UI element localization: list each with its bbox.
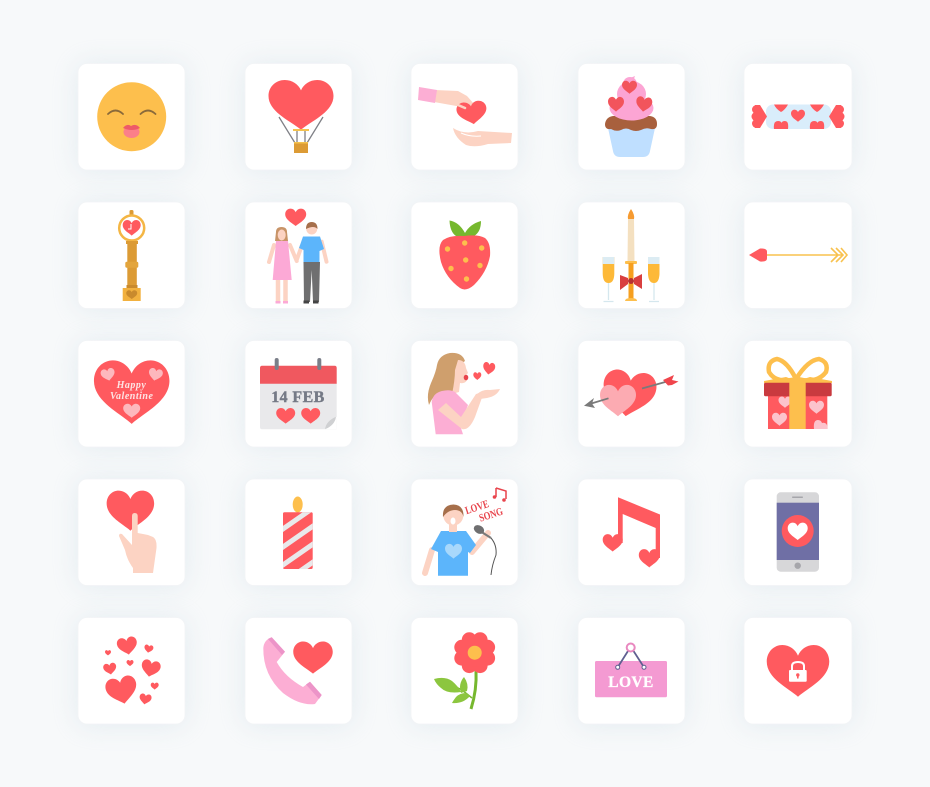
icon: kissing face: [97, 82, 166, 151]
card: phone call heart: [245, 618, 352, 724]
icon: cupcake with hearts: [605, 76, 657, 157]
icon: heart street clock: [119, 210, 144, 301]
card: happy valentine heart: [78, 340, 185, 447]
icon: gift box: [764, 359, 832, 429]
card: cupcake: [578, 64, 685, 170]
icon: candlestick and champagne glasses: [603, 209, 660, 302]
card: couple: [245, 202, 352, 308]
text: Happy Valentine: Valentine: [110, 391, 153, 402]
card: hands giving heart: [411, 64, 518, 170]
icon: hands with heart: [418, 87, 512, 146]
icon: heart tipped arrow: [749, 248, 847, 262]
icon: red flower with leaves: [434, 632, 495, 709]
icon: wrapped candy with hearts: [752, 104, 844, 129]
card: clock tower: [78, 202, 185, 308]
icon: woman blowing hearts: [428, 353, 500, 434]
text: 14 FEB: 14 FEB: [271, 389, 325, 406]
text: LOVE SONG: [464, 498, 505, 525]
icon: couple holding hands: [269, 209, 326, 304]
card: flower: [411, 618, 518, 724]
text: LOVE SONG: SONG: [478, 506, 505, 525]
card: finger touching heart: [78, 479, 185, 586]
icon: heart music notes: [603, 497, 660, 567]
card: hearts with arrow: [578, 340, 685, 447]
icon: heart hot air balloon: [268, 80, 334, 153]
card: scattered hearts: [78, 618, 185, 724]
text: LOVE SONG: LOVE: [464, 498, 491, 517]
text: LOVE: LOVE: [608, 674, 654, 691]
card: candle and glasses: [578, 202, 685, 308]
icon: man singing love song: [425, 488, 506, 576]
card: woman blowing kiss: [411, 340, 518, 447]
icon: cluster of hearts: [103, 636, 162, 707]
card: gift: [744, 340, 852, 447]
icon: hand pointing at heart: [107, 491, 157, 573]
card: arrow: [744, 202, 852, 308]
text: Happy Valentine: Happy: [117, 380, 146, 391]
card: music note: [578, 479, 685, 586]
icon: heart with padlock: [767, 645, 829, 697]
icon: candle: [283, 496, 313, 569]
card: calendar: [245, 340, 352, 447]
card: love song singer: [411, 479, 518, 586]
card: striped candle: [245, 479, 352, 586]
icon: phone with heart: [777, 492, 819, 572]
card: locked heart: [744, 618, 852, 724]
card: kissing emoji: [78, 64, 185, 170]
icon: heart with greeting: [94, 360, 169, 424]
card: love sign: [578, 618, 685, 724]
icon: handset and heart: [263, 637, 333, 704]
card: heart balloon: [245, 64, 352, 170]
icon: strawberry: [439, 220, 490, 289]
card: smartphone: [744, 479, 852, 586]
card: strawberry: [411, 202, 518, 308]
card: candy: [744, 64, 852, 170]
icon: arrow through two hearts: [584, 368, 678, 420]
